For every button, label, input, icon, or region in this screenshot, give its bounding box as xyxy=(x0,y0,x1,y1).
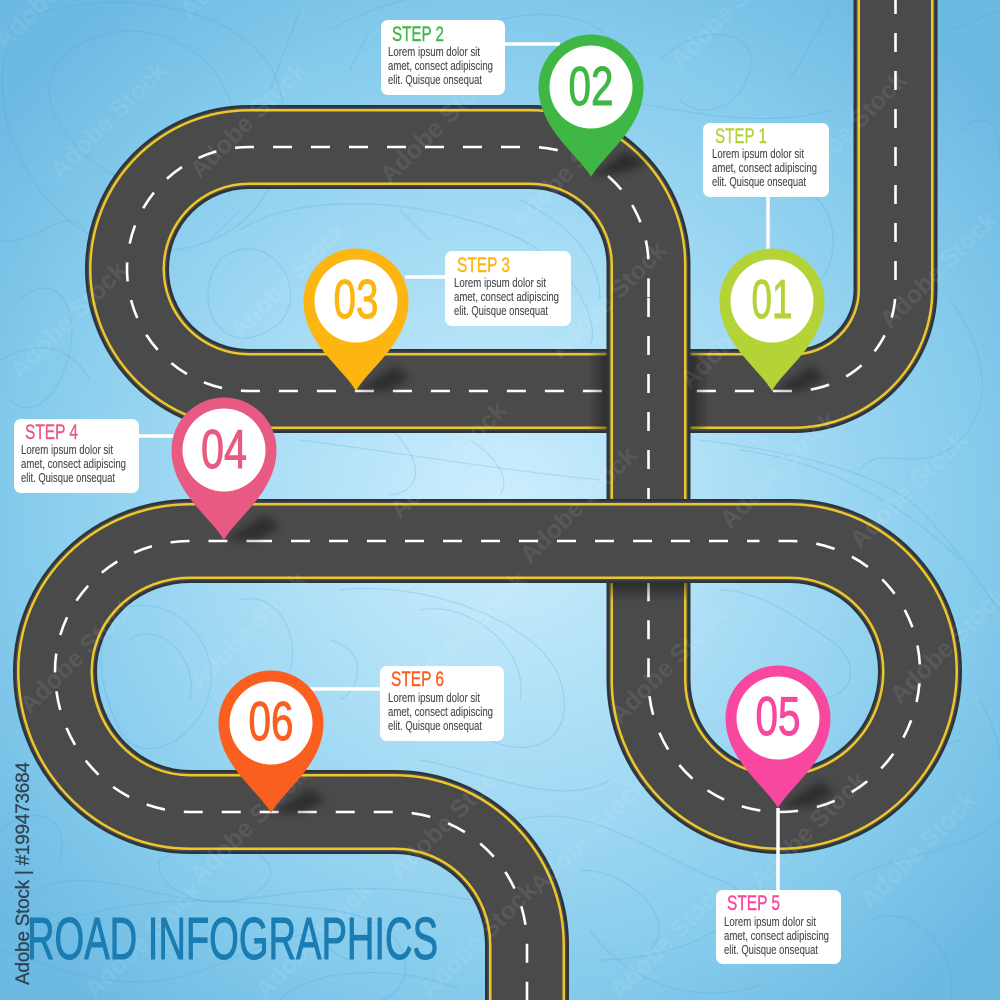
watermark: Adobe Stock xyxy=(404,566,532,694)
connector lines xyxy=(139,44,778,890)
pin 06 xyxy=(218,670,325,813)
watermark: Adobe Stock xyxy=(854,786,982,914)
watermark: Adobe Stock xyxy=(224,216,352,344)
callout: step 1 xyxy=(703,123,829,197)
watermark: Adobe Stock xyxy=(184,566,312,694)
callout: step 6: STEP 6 xyxy=(391,668,444,691)
callout: step 3: STEP 3 xyxy=(457,254,510,277)
watermark: Adobe Stock xyxy=(184,761,312,889)
pin 05: 05 xyxy=(756,685,800,747)
callout: step 4: elit. Quisque onsequat xyxy=(21,471,115,485)
callout: step 2: STEP 2 xyxy=(392,23,444,46)
pin 04 xyxy=(172,398,280,540)
callout: step 3: Lorem ipsum dolor sit xyxy=(454,276,546,290)
pin 05 xyxy=(726,666,835,808)
pin 06: 06 xyxy=(248,690,294,752)
road underpass shadow below middle road xyxy=(610,582,687,602)
callout: step 4: Lorem ipsum dolor sit xyxy=(21,443,113,457)
pin 02 xyxy=(538,34,648,177)
pin 02: 02 xyxy=(568,55,614,117)
watermark: Adobe Stock xyxy=(744,766,872,894)
watermark: Adobe Stock xyxy=(604,601,732,729)
callout: step 4: amet, consect adipiscing xyxy=(21,457,126,471)
callout: step 2: amet, consect adipiscing xyxy=(388,59,493,73)
pin 01 xyxy=(720,248,825,391)
callout: step 3: amet, consect adipiscing xyxy=(454,290,559,304)
pin 01: 01 xyxy=(752,268,792,330)
watermark: Adobe Stock xyxy=(874,206,1000,334)
callout: step 2: elit. Quisque onsequat xyxy=(388,73,482,87)
callout: step 6: Lorem ipsum dolor sit xyxy=(388,691,480,705)
callout: step 4: STEP 4 xyxy=(25,421,78,444)
callout: step 1: Lorem ipsum dolor sit xyxy=(712,147,804,161)
watermark: Adobe Stock xyxy=(674,266,802,394)
watermark: Adobe Stock xyxy=(184,56,312,184)
road: vertical overpass segment xyxy=(606,298,690,500)
pin 03: 03 xyxy=(334,268,378,330)
pin 04: 04 xyxy=(201,418,247,480)
watermark: Adobe Stock xyxy=(384,396,512,524)
callout: step 1: amet, consect adipiscing xyxy=(712,161,817,175)
callout: step 3 xyxy=(445,251,571,326)
pin 03 xyxy=(304,248,410,391)
watermark: Adobe Stock xyxy=(514,441,642,569)
callout: step 6: elit. Quisque onsequat xyxy=(388,719,482,733)
callout: step 4 xyxy=(14,419,139,493)
watermark: Adobe Stock xyxy=(504,106,632,234)
callout: step 5: STEP 5 xyxy=(727,892,780,915)
title: ROAD INFOGRAPHICS xyxy=(27,906,438,972)
callout: step 1: STEP 1 xyxy=(715,125,767,148)
callout: step 6: amet, consect adipiscing xyxy=(388,705,493,719)
watermark: Adobe Stock xyxy=(844,426,972,554)
watermark: Adobe Stock xyxy=(384,756,512,884)
callout: step 5: elit. Quisque onsequat xyxy=(724,943,818,957)
watermark: Adobe Stock xyxy=(374,61,502,189)
watermark: Adobe Stock xyxy=(784,66,912,194)
callout: step 2 xyxy=(381,20,505,95)
callout: step 5 xyxy=(716,890,841,964)
road: middle horizontal overpass segment xyxy=(253,499,747,583)
callout: step 2: Lorem ipsum dolor sit xyxy=(388,45,480,59)
road overpass shadow on lower horizontal xyxy=(588,353,709,429)
watermark: Adobe Stock xyxy=(14,591,142,719)
stock credit: Adobe Stock | #199473684 xyxy=(13,762,34,985)
watermark: Adobe Stock xyxy=(544,236,672,364)
watermark: Adobe Stock xyxy=(524,771,652,899)
watermark: Adobe Stock xyxy=(4,256,132,384)
callout: step 5: amet, consect adipiscing xyxy=(724,929,829,943)
watermark: Adobe Stock xyxy=(44,56,172,184)
callout: step 1: elit. Quisque onsequat xyxy=(712,175,806,189)
watermark: Adobe Stock xyxy=(714,406,842,534)
callout: step 6 xyxy=(380,666,504,741)
callout: step 3: elit. Quisque onsequat xyxy=(454,304,548,318)
callout: step 5: Lorem ipsum dolor sit xyxy=(724,915,816,929)
